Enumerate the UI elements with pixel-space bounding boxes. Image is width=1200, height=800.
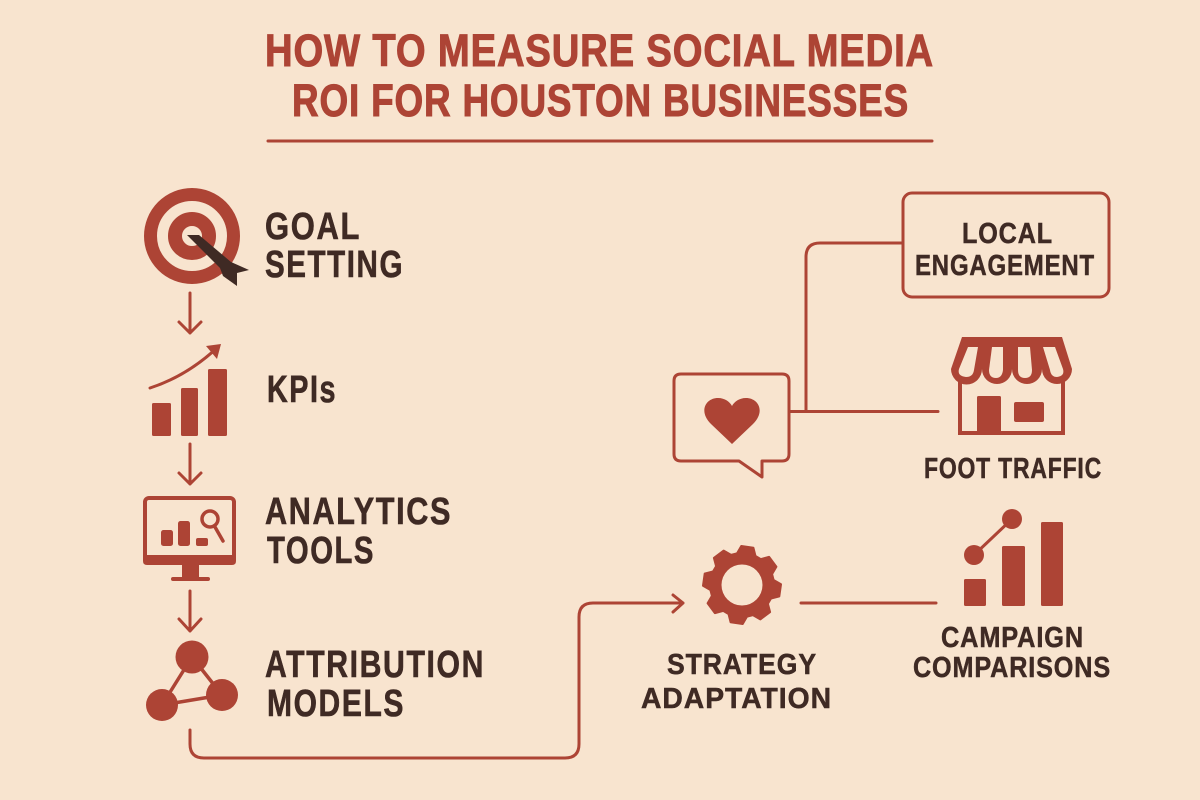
label: strategy adaptation: STRATEGY xyxy=(667,649,817,681)
panel: local engagement: LOCAL xyxy=(962,218,1053,250)
label: attribution models: MODELS xyxy=(267,683,405,725)
label: goal setting: SETTING xyxy=(265,244,404,286)
title: HOW TO MEASURE SOCIAL MEDIA xyxy=(265,25,934,76)
icon: target with arrow xyxy=(150,194,249,286)
arrow: KPIs to analytics xyxy=(179,444,201,484)
label: analytics tools: TOOLS xyxy=(267,530,375,572)
connector: gear to campaign chart xyxy=(801,602,936,604)
arrow: analytics to attribution xyxy=(179,591,201,631)
icon: gear xyxy=(703,546,781,624)
icon: campaign comparison chart xyxy=(964,509,1063,606)
label: campaign comparisons: COMPARISONS xyxy=(913,652,1111,684)
label: foot traffic: FOOT TRAFFIC xyxy=(924,453,1102,485)
label: KPIs: KPIs xyxy=(267,369,337,411)
arrow: goal to KPIs xyxy=(179,293,201,333)
connector: bubble to local engagement xyxy=(806,243,903,411)
icon: storefront xyxy=(951,337,1072,433)
title xyxy=(265,25,934,126)
icon: speech bubble with heart xyxy=(674,374,789,477)
icon: attribution network xyxy=(146,640,238,721)
label: campaign comparisons xyxy=(913,622,1111,684)
arrow: attribution to strategy adaptation xyxy=(190,595,683,758)
label: strategy adaptation xyxy=(641,649,832,715)
label: analytics tools xyxy=(265,491,452,572)
connector: bubble to foot traffic xyxy=(790,410,938,413)
label: goal setting: GOAL xyxy=(265,206,361,248)
label: strategy adaptation: ADAPTATION xyxy=(641,683,832,715)
icon: KPI bars with trend arrow xyxy=(150,344,227,436)
panel: local engagement: ENGAGEMENT xyxy=(915,250,1095,282)
label: campaign comparisons: CAMPAIGN xyxy=(941,622,1084,654)
label: goal setting xyxy=(265,206,404,286)
panel: local engagement xyxy=(903,193,1109,297)
title: ROI FOR HOUSTON BUSINESSES xyxy=(292,75,909,126)
icon: analytics monitor xyxy=(143,498,236,581)
label: attribution models: ATTRIBUTION xyxy=(265,644,485,686)
label: attribution models xyxy=(265,644,485,725)
label: analytics tools: ANALYTICS xyxy=(265,491,452,533)
